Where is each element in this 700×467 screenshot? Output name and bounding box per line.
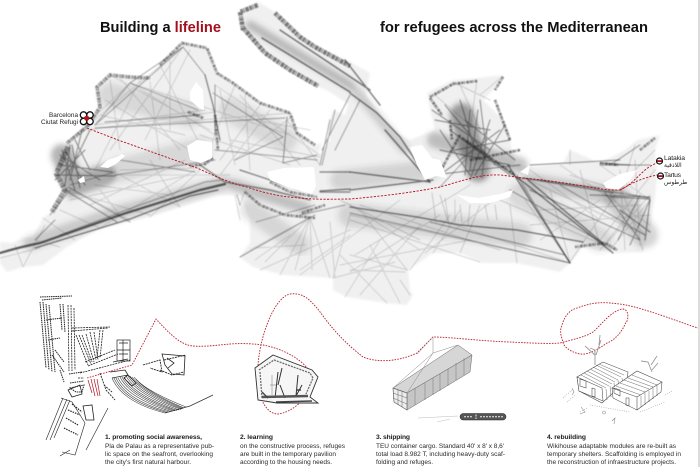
sea silhouette <box>0 2 660 305</box>
title: Building a lifeline <box>100 20 221 36</box>
coastline texture <box>52 5 655 250</box>
panel: shipping: folding and refuges. <box>376 459 433 466</box>
panel: rebuilding: the reconstruction of infraestructure projects. <box>547 459 676 466</box>
caption 3: 3. shipping <box>376 434 410 441</box>
pavilion drawing <box>255 355 318 403</box>
panel: rebuilding: Wikihouse adaptable modules are re-built as <box>547 443 677 450</box>
red sector blocks <box>88 379 100 396</box>
panel: shipping: TEU container cargo. Standard 40' x 8' x 8,6' <box>376 443 504 450</box>
marker: Latakia: اللاذقية <box>664 162 682 169</box>
caption 4: 4. rebuilding <box>547 434 586 441</box>
marker: Barcelona Ciutat Refugi: Barcelona <box>49 112 78 119</box>
panel: learning: are built in the temporary pavilion <box>240 451 336 458</box>
map: Mediterranean shipping network <box>0 2 660 305</box>
marker: Barcelona Ciutat Refugi: Ciutat Refugi <box>41 119 78 126</box>
panel: learning: on the constructive process, refuges <box>240 443 346 450</box>
icon: clover ring <box>80 112 93 125</box>
plan drawing: Barcelona seafront <box>40 296 213 456</box>
title <box>100 20 648 36</box>
panel: shipping <box>376 337 506 466</box>
plan drawing: harbour fan <box>112 376 186 413</box>
red dashed lower route <box>87 294 698 414</box>
container drawing <box>393 337 472 410</box>
marker: Tartus: طرطوس <box>664 179 688 186</box>
panel: promoting social awareness <box>40 296 214 466</box>
marker: Barcelona Ciutat Refugi <box>41 112 93 126</box>
caption 2: 2. learning <box>240 434 273 441</box>
icon: cargo ship <box>418 414 506 422</box>
wikihouse drawing <box>563 335 672 424</box>
panel: promoting social awareness: the city's first natural harbour. <box>105 459 191 466</box>
dark lanes <box>0 184 225 253</box>
fine lanes <box>0 47 320 267</box>
panel: promoting social awareness: lic space on the seafront, overlooking <box>105 451 213 458</box>
red dashed sea route <box>87 128 657 199</box>
marker: Tartus <box>658 172 688 186</box>
panel: learning: according to the housing needs. <box>240 459 332 466</box>
marker: Tartus: Tartus <box>664 172 682 179</box>
panel: rebuilding <box>547 335 681 466</box>
marker: Latakia: Latakia <box>664 155 685 162</box>
medium lanes <box>35 47 465 257</box>
broad density tones <box>30 25 645 245</box>
panel: rebuilding: temporary shelters. Scaffolding is employed in <box>547 451 681 458</box>
panel: promoting social awareness: Pla de Palau as a representative pub- <box>105 443 214 450</box>
islands <box>78 82 637 203</box>
plan drawing: gardens <box>143 355 186 375</box>
panel: shipping: total load 8.982 T, including heavy-duty scaf- <box>376 451 505 458</box>
plan drawing: port <box>46 398 108 456</box>
title: for refugees across the Mediterranean <box>380 20 648 36</box>
marker: Latakia <box>656 155 685 169</box>
caption 1: 1. promoting social awareness, <box>105 434 202 441</box>
shipping lanes <box>0 30 655 303</box>
panel: learning <box>240 355 346 466</box>
